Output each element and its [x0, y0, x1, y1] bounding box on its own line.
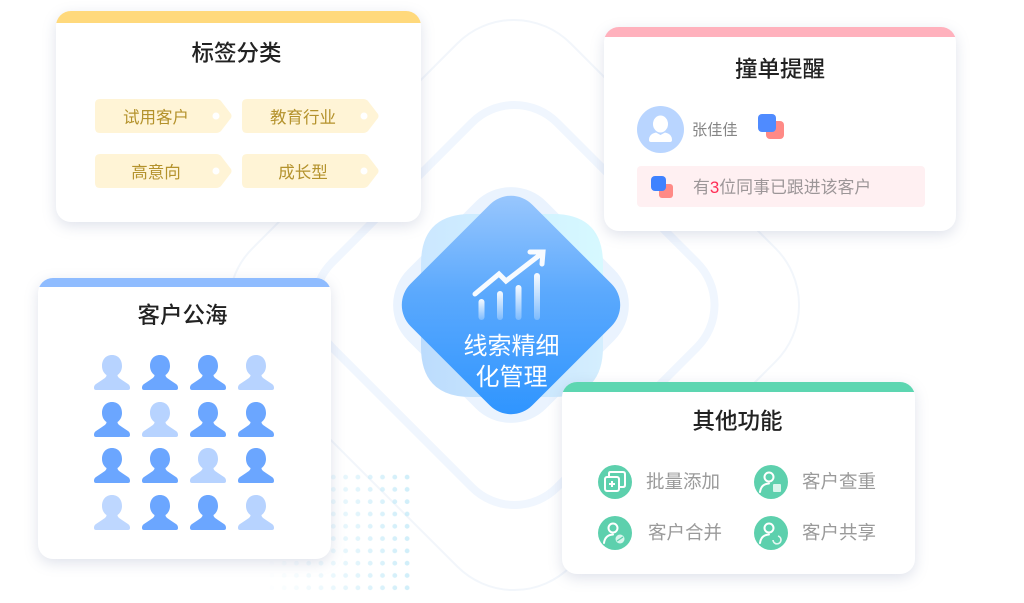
tag: 试用客户: 试用客户 — [123, 109, 189, 127]
yellow top bar — [56, 11, 421, 23]
notice text: 有3位同事已跟进该客户 — [693, 178, 871, 197]
feature: 客户共享: 客户共享 — [802, 522, 876, 543]
heading: 标签分类 — [191, 41, 282, 66]
tag: 试用客户 — [95, 99, 232, 133]
tag: 高意向: 高意向 — [131, 164, 181, 182]
pink top bar — [604, 27, 956, 37]
pale rotated blob behind the diamond — [372, 166, 650, 444]
tag: 教育行业: 教育行业 — [270, 109, 336, 127]
tag: 教育行业 — [242, 99, 378, 133]
feature: 客户查重 — [754, 465, 876, 499]
feature: 批量添加 — [598, 465, 720, 499]
feature: 客户共享 — [754, 516, 876, 550]
cyan rounded blob behind the diamond — [421, 214, 603, 397]
heading: 客户公海 — [137, 303, 228, 328]
feature: 客户合并: 客户合并 — [648, 522, 722, 543]
diamond label second line: 化管理 — [476, 364, 548, 391]
background dot pattern — [294, 474, 410, 590]
diamond label: 线索精细 — [464, 333, 560, 360]
icon: rising bar chart with arrow — [475, 252, 543, 320]
green top bar — [562, 382, 915, 392]
icon: avatar — [637, 106, 684, 153]
icon: overlapping squares — [758, 114, 784, 139]
people grid — [94, 355, 274, 530]
central diamond badge — [402, 196, 620, 414]
panel: 撞单提醒 — [604, 27, 956, 231]
background middle diamond outline — [290, 80, 739, 530]
feature: 客户合并 — [598, 516, 722, 550]
tag: 成长型: 成长型 — [278, 164, 328, 182]
background outer diamond outline — [196, 0, 832, 603]
panel: 其他功能 — [562, 382, 915, 574]
name: 张佳佳 — [692, 122, 738, 139]
blue top bar — [38, 278, 331, 287]
panel: 客户公海 — [38, 278, 331, 559]
feature: 批量添加: 批量添加 — [646, 471, 720, 492]
icon: small overlapping squares — [651, 176, 673, 198]
tag: 成长型 — [242, 154, 378, 188]
collision notice — [637, 166, 925, 207]
tag: 高意向 — [95, 154, 232, 188]
panel: 标签分类 — [56, 11, 421, 222]
heading: 撞单提醒 — [735, 57, 825, 82]
feature: 客户查重: 客户查重 — [802, 471, 876, 492]
heading: 其他功能 — [692, 409, 782, 434]
